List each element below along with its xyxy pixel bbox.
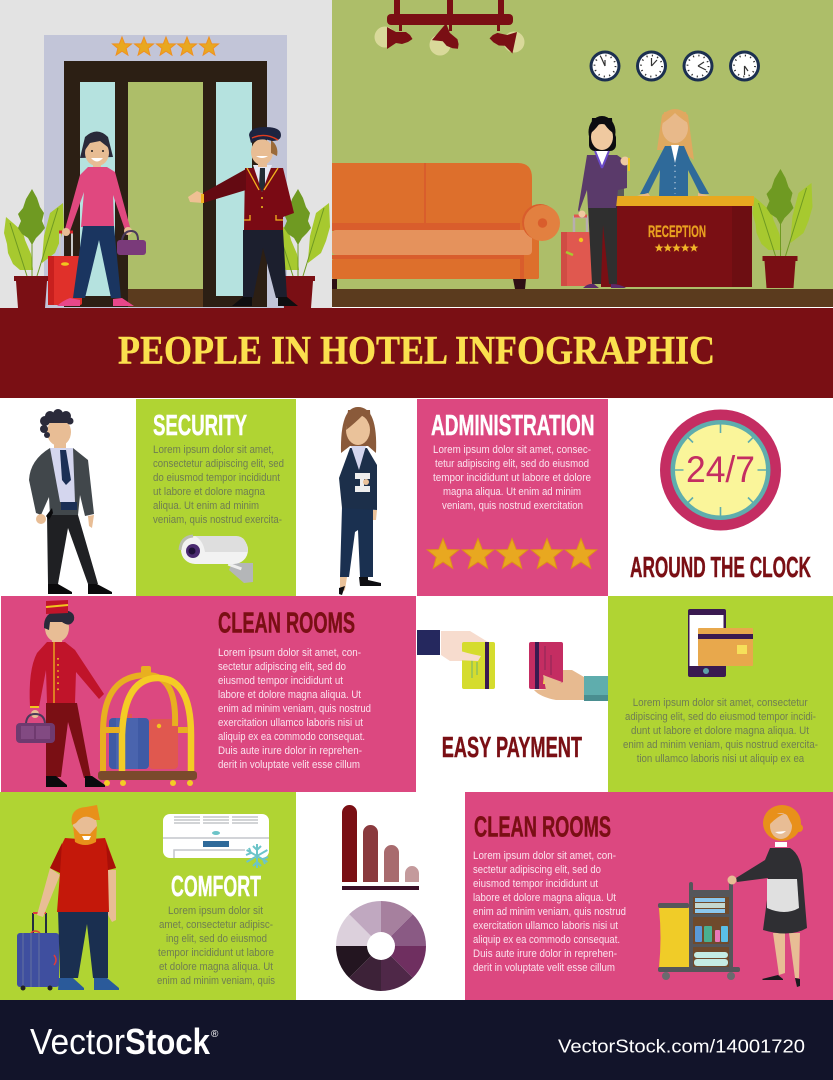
- text: payment body: Lorem ipsum dolor sit amet, consectetur: [633, 697, 808, 709]
- bellhop greeting: [188, 127, 298, 306]
- five star rating: [427, 538, 597, 568]
- text: clean rooms body: Duis aute irure dolor in reprehen-: [473, 948, 617, 960]
- text: clean rooms body: sectetur adipiscing elit, sed do: [473, 864, 601, 876]
- text: payment body: enim ad minim veniam, quis nostrud exercita-: [623, 739, 818, 751]
- footer watermark: Vector: [30, 1021, 125, 1062]
- text: clean rooms body: eiusmod tempor incididunt ut: [218, 675, 343, 687]
- text: payment body: tion ullamco laboris nisi ut aliquip ex ea: [637, 753, 804, 765]
- text: comfort body: [157, 905, 275, 987]
- text: comfort body: amet, consectetur adipisc-: [159, 919, 273, 931]
- text: clean rooms body: sectetur adipiscing elit, sed do: [218, 661, 346, 673]
- footer watermark: ®: [211, 1029, 219, 1040]
- text: payment body: [623, 697, 818, 765]
- plant left: [4, 189, 64, 308]
- reception desk: [601, 188, 754, 287]
- panel: clean rooms maid: [465, 792, 833, 1000]
- text: security body: ut labore et dolore magna: [153, 486, 265, 498]
- text: clean rooms body: enim ad minim veniam, quis nostrud: [218, 703, 371, 715]
- icon: phone and card: [688, 609, 753, 677]
- text: clean rooms body: derit in voluptate velit esse cillum: [473, 962, 615, 974]
- ceiling lamp: [374, 0, 524, 56]
- icon: hand with pink card: [529, 642, 608, 701]
- wall clocks: [590, 50, 760, 82]
- panel: around the clock: [608, 399, 833, 596]
- sofa: [332, 163, 560, 289]
- text: clean rooms body: exercitation ullamco laboris nisi ut: [218, 717, 363, 729]
- text: clean rooms body: aliquip ex ea commodo consequat.: [218, 731, 365, 743]
- text: clean rooms body: Lorem ipsum dolor sit amet, con-: [473, 850, 616, 862]
- text: clean rooms body: derit in voluptate velit esse cillum: [218, 759, 360, 771]
- figure: maid: [728, 805, 807, 987]
- panel: comfort: [0, 792, 296, 1000]
- title banner: PEOPLE IN HOTEL INFOGRAPHIC: [118, 328, 715, 372]
- icon: 24/7 clock: 24/7: [686, 449, 755, 490]
- text: administration body: Lorem ipsum dolor sit amet, consec-: [433, 444, 591, 456]
- text: security body: Lorem ipsum dolor sit amet,: [153, 444, 274, 456]
- panel: easy payment: [416, 596, 608, 792]
- panel: charts: [296, 792, 465, 1000]
- text: comfort body: ing elit, sed do eiusmod: [166, 933, 267, 945]
- plant right of elevator: [270, 189, 330, 308]
- text: comfort body: Lorem ipsum dolor sit: [168, 905, 263, 917]
- icon: hand with green card: [417, 630, 495, 689]
- text: security body: aliqua. Ut enim ad minim: [153, 500, 259, 512]
- heading: clean rooms: CLEAN ROOMS: [218, 608, 355, 640]
- heading: clean rooms: CLEAN ROOMS: [474, 812, 611, 844]
- text: comfort body: tempor incididunt ut labore: [158, 947, 274, 959]
- text: administration body: tempor incididunt ut labore et dolore: [433, 472, 591, 484]
- text: administration body: [433, 444, 591, 512]
- panel: administration: [296, 399, 608, 596]
- text: comfort body: et dolore magna aliqua. Ut: [159, 961, 273, 973]
- receptionist: [637, 109, 710, 196]
- text: clean rooms body: enim ad minim veniam, quis nostrud: [473, 906, 626, 918]
- figure: security guard: [29, 409, 112, 594]
- text: clean rooms body: Lorem ipsum dolor sit amet, con-: [218, 647, 361, 659]
- text: clean rooms body: aliquip ex ea commodo consequat.: [473, 934, 620, 946]
- heading: administration: ADMINISTRATION: [431, 410, 594, 442]
- text: clean rooms body: labore et dolore magna aliqua. Ut: [473, 892, 616, 904]
- icon: snowflake: [246, 844, 268, 868]
- text: comfort body: enim ad minim veniam, quis: [157, 975, 275, 987]
- text: security body: [153, 444, 284, 526]
- icon: 24/7 clock: [660, 410, 781, 530]
- figure: administration woman: [339, 407, 381, 595]
- heading: comfort: COMFORT: [171, 871, 261, 903]
- text: clean rooms body: [218, 647, 371, 771]
- text: security body: veniam, quis nostrud exercita-: [153, 514, 282, 526]
- icon: air conditioner: [163, 814, 269, 868]
- panel: clean rooms bellhop: [1, 596, 416, 792]
- pie chart: [336, 901, 426, 991]
- title banner: [0, 308, 833, 398]
- plant at reception: [752, 169, 812, 288]
- heading: security: SECURITY: [153, 410, 247, 442]
- guest at reception with suitcase: [561, 116, 630, 288]
- elevator door: [44, 35, 287, 308]
- icon: housekeeping cart: [658, 882, 740, 980]
- text: payment body: dunt ut labore et dolore magna aliqua. Ut: [631, 725, 809, 737]
- footer watermark: VectorStock.com/14001720: [558, 1036, 805, 1057]
- text: payment body: adipiscing elit, sed do eiusmod tempor incidi-: [625, 711, 816, 723]
- text: administration body: veniam, quis nostrud exercitation: [442, 500, 583, 512]
- guest woman with luggage: [48, 132, 146, 306]
- text: administration body: tetur adipiscing elit, sed do eiusmod: [435, 458, 589, 470]
- figure: bearded traveller: [17, 805, 119, 990]
- footer watermark: Stock: [125, 1021, 211, 1062]
- text: administration body: magna aliqua. Ut enim ad minim: [443, 486, 581, 498]
- text: security body: do eiusmod tempor incididunt: [153, 472, 280, 484]
- panel: hotel lobby scene: [0, 0, 833, 308]
- text: clean rooms body: exercitation ullamco laboris nisi ut: [473, 920, 618, 932]
- text: security body: consectetur adipiscing elit, sed: [153, 458, 284, 470]
- panel: security: [0, 399, 296, 596]
- figure: bellhop with cart: [16, 600, 197, 787]
- text: clean rooms body: Duis aute irure dolor in reprehen-: [218, 745, 362, 757]
- footer watermark: [0, 1000, 833, 1080]
- icon: security camera: [180, 536, 253, 583]
- bar chart: [342, 805, 419, 890]
- text: clean rooms body: eiusmod tempor incididunt ut: [473, 878, 598, 890]
- panel: payment info: [608, 596, 833, 792]
- hotel stars: [112, 37, 218, 55]
- heading: easy payment: EASY PAYMENT: [442, 732, 582, 764]
- reception desk: RECEPTION: [648, 223, 706, 241]
- text: clean rooms body: [473, 850, 626, 974]
- text: clean rooms body: labore et dolore magna aliqua. Ut: [218, 689, 361, 701]
